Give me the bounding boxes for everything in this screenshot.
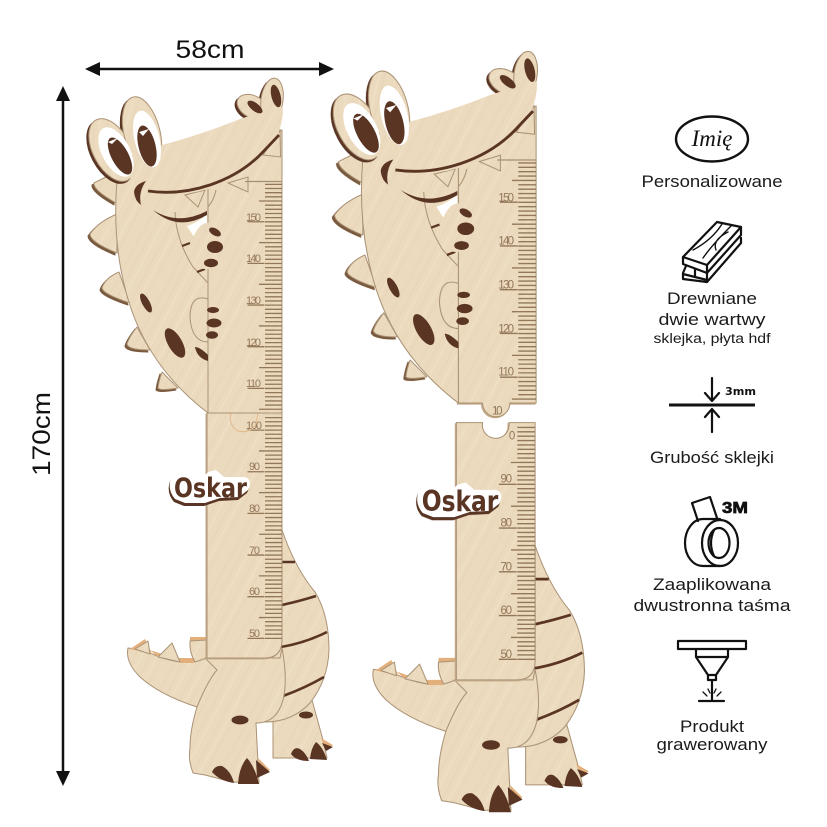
arrow: width dimension bbox=[85, 62, 334, 76]
mouth gap bbox=[187, 214, 207, 240]
width label: 58cm bbox=[176, 36, 244, 64]
tail bbox=[373, 669, 472, 731]
ruler numbers upper: 130 bbox=[498, 280, 514, 292]
ruler numbers lower: 90 bbox=[500, 473, 512, 485]
eye sockets and nostril bumps bbox=[79, 77, 286, 189]
label: double-sided tape applied: Zaaplikowana bbox=[653, 575, 772, 594]
ruler ticks lower bbox=[508, 424, 526, 660]
head and upper jaw bbox=[371, 79, 537, 172]
icon: double-sided tape bbox=[685, 497, 748, 566]
ruler numbers upper: 110 bbox=[498, 367, 514, 379]
label: engraved product bbox=[656, 717, 768, 754]
height label: 170cm bbox=[28, 392, 56, 476]
ruler numbers lower: 50 bbox=[500, 649, 512, 661]
ruler numbers upper: 120 bbox=[498, 324, 514, 336]
neck marks bbox=[431, 225, 455, 255]
ruler numbers lower bbox=[500, 430, 515, 661]
label: double-sided tape applied: dwustronna taśma bbox=[634, 596, 791, 615]
ruler numbers upper bbox=[246, 212, 261, 390]
tail spikes bbox=[376, 658, 456, 685]
icon: double-sided tape: 3M bbox=[722, 500, 748, 517]
icon: name oval bbox=[676, 116, 748, 162]
ruler upper section bbox=[208, 130, 282, 413]
head and upper jaw bbox=[125, 105, 283, 193]
label: wooden, two layers: dwie wartwy bbox=[658, 310, 766, 329]
crocodile separated: upper part bbox=[323, 50, 540, 418]
name tag: Oskar: Oskar bbox=[422, 485, 498, 518]
belly and back bbox=[240, 530, 329, 722]
ruler upper section with puzzle knob bbox=[458, 106, 536, 417]
lower jaw smile bbox=[401, 190, 457, 203]
tail spikes bbox=[130, 637, 207, 663]
eye left bbox=[336, 97, 388, 161]
ruler numbers upper: 110 bbox=[246, 378, 261, 390]
smile bbox=[148, 135, 279, 192]
smile bbox=[395, 111, 533, 171]
front leg and hip bbox=[189, 648, 285, 783]
lower jaw smile bbox=[153, 210, 207, 222]
lower hand bbox=[190, 298, 222, 342]
tail bbox=[128, 648, 222, 707]
upper hand bbox=[440, 203, 474, 252]
teeth bbox=[434, 106, 535, 187]
neck marks bbox=[182, 243, 205, 272]
nostrils bbox=[498, 57, 537, 91]
ruler numbers lower: 80 bbox=[249, 503, 260, 515]
belly stripes bbox=[534, 579, 582, 720]
icon: name oval: Imię bbox=[691, 126, 732, 151]
label: plywood thickness: Grubość sklejki bbox=[650, 448, 774, 467]
eye sockets and nostril bumps bbox=[323, 50, 540, 168]
inner neck lines bbox=[424, 192, 458, 267]
back foot claws bbox=[291, 712, 333, 761]
ruler ticks upper bbox=[497, 160, 536, 400]
ruler numbers upper: 150 bbox=[498, 192, 514, 204]
icon: wood planks bbox=[683, 222, 741, 282]
label: wooden, two layers bbox=[654, 289, 771, 346]
label: engraved product: grawerowany bbox=[656, 735, 768, 754]
ruler ticks lower bbox=[256, 414, 274, 639]
ruler numbers lower: 50 bbox=[249, 628, 260, 640]
icon: laser engraver bbox=[678, 641, 746, 701]
ruler numbers upper: 140 bbox=[246, 253, 261, 265]
body and mouth area bbox=[116, 175, 208, 413]
ruler numbers lower: 60 bbox=[500, 605, 512, 617]
ruler lower section bbox=[207, 413, 282, 658]
crocodile assembled: upper part bbox=[79, 77, 286, 413]
upper hand bbox=[191, 223, 223, 269]
label: personalised: Personalizowane bbox=[642, 172, 782, 191]
cheek mark bbox=[134, 181, 146, 205]
ruler numbers lower: 70 bbox=[249, 545, 260, 557]
body and mouth area bbox=[361, 153, 458, 403]
front leg and hip bbox=[438, 669, 539, 811]
back foot claws bbox=[545, 736, 589, 788]
back leg bbox=[526, 724, 582, 785]
ruler numbers lower: 90 bbox=[249, 461, 260, 473]
front foot claws bbox=[462, 740, 522, 812]
front foot claws bbox=[212, 716, 270, 784]
teeth bbox=[185, 130, 280, 207]
ruler numbers upper: 120 bbox=[246, 337, 261, 349]
back spikes bbox=[334, 150, 427, 378]
ruler lower section with socket bbox=[456, 423, 535, 680]
ruler numbers lower bbox=[246, 420, 262, 640]
lower hand bbox=[440, 282, 473, 328]
body spots bbox=[138, 292, 208, 361]
back leg bbox=[273, 700, 327, 758]
ruler numbers lower: 70 bbox=[500, 562, 512, 574]
ruler numbers lower: 80 bbox=[500, 518, 512, 530]
body spots bbox=[385, 276, 458, 348]
label: double-sided tape applied bbox=[634, 575, 791, 615]
ruler numbers lower: 100 bbox=[246, 420, 262, 432]
label: engraved product: Produkt bbox=[680, 717, 744, 736]
ruler numbers upper: 130 bbox=[246, 295, 261, 307]
eye right bbox=[374, 83, 414, 148]
belly and back bbox=[491, 546, 584, 747]
icon: thickness 3mm: 3mm bbox=[725, 385, 756, 398]
name tag: Oskar: Oskar bbox=[174, 473, 248, 504]
ruler numbers upper: 10 bbox=[492, 406, 503, 418]
crocodile assembled: lower part bbox=[128, 413, 333, 784]
ruler numbers upper: 140 bbox=[498, 235, 514, 247]
nostrils bbox=[245, 84, 283, 116]
belly stripes bbox=[281, 562, 327, 696]
ruler numbers upper bbox=[492, 192, 514, 418]
back spikes bbox=[90, 172, 178, 390]
label: wooden, two layers: sklejka, płyta hdf bbox=[654, 331, 771, 346]
arrow: height dimension bbox=[56, 86, 70, 786]
crocodile separated: lower part bbox=[373, 423, 589, 812]
ruler numbers lower: 0 bbox=[509, 430, 515, 442]
inner neck lines bbox=[175, 212, 208, 283]
mouth gap bbox=[436, 194, 457, 221]
label: wooden, two layers: Drewniane bbox=[667, 289, 757, 308]
eye right bbox=[128, 108, 166, 170]
icon: thickness 3mm bbox=[669, 378, 756, 432]
eye left bbox=[91, 122, 141, 182]
ruler numbers upper: 150 bbox=[246, 212, 261, 224]
puzzle joint outline bbox=[208, 413, 282, 432]
ruler ticks upper bbox=[245, 182, 282, 410]
cheek mark bbox=[381, 159, 393, 185]
ruler numbers lower: 60 bbox=[249, 586, 260, 598]
